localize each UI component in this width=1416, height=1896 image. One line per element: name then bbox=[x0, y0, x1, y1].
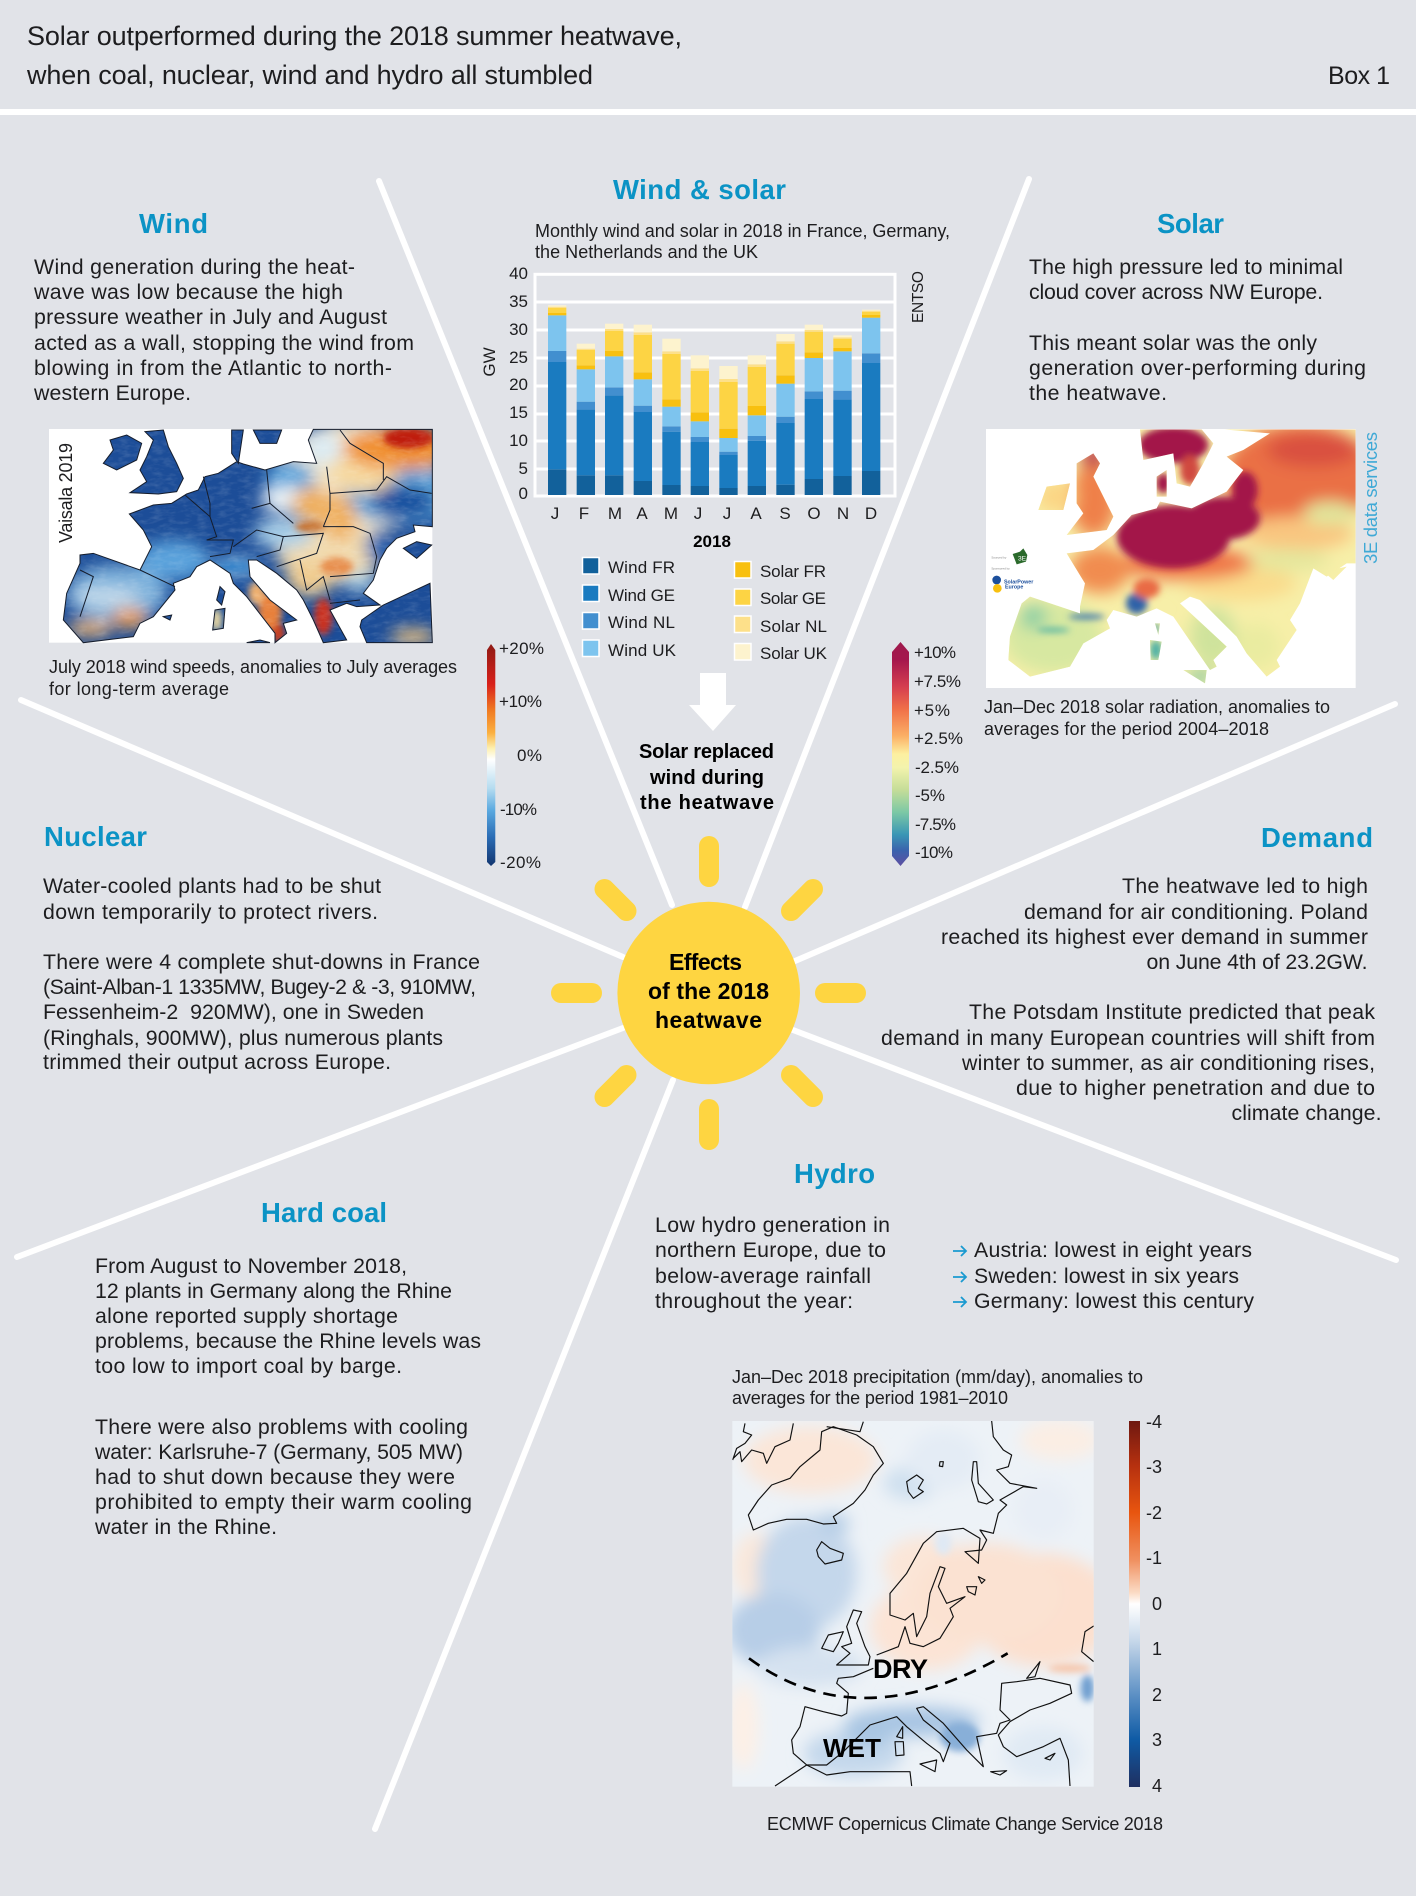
heading: hydro: Hydro bbox=[794, 1158, 875, 1189]
precipitation colour scale: 1 bbox=[1152, 1639, 1162, 1659]
y axis labels: 0 bbox=[519, 484, 528, 503]
sun disc bbox=[617, 902, 800, 1084]
month labels bbox=[551, 504, 877, 523]
logo: SolarPower Europe bbox=[992, 576, 1033, 593]
solar colour scale bbox=[892, 642, 963, 866]
heading: solar: Solar bbox=[1157, 208, 1224, 239]
panel: wind and solar chart bbox=[480, 174, 950, 814]
wind colour scale: +20% bbox=[499, 639, 544, 658]
precipitation colour scale: 2 bbox=[1152, 1685, 1162, 1705]
title: when coal, nuclear, wind and hydro all stumbled bbox=[26, 60, 593, 90]
header rule bbox=[0, 109, 1416, 115]
hydro map caption: Jan–Dec 2018 precipitation (mm/day), anomalies to bbox=[732, 1367, 1143, 1387]
y axis labels: 30 bbox=[509, 320, 528, 339]
wind body text: western Europe. bbox=[33, 381, 191, 405]
source: ENTSO: ENTSO bbox=[910, 271, 927, 323]
title: Solar outperformed during the 2018 summer heatwave, bbox=[27, 21, 682, 51]
hard coal body text: There were also problems with cooling bbox=[95, 1415, 468, 1439]
nuclear body text: (Ringhals, 900MW), plus numerous plants bbox=[43, 1026, 443, 1050]
nuclear body text: (Saint-Alban-1 1335MW, Bugey-2 & -3, 910MW, bbox=[43, 975, 476, 999]
callout: solar replaced wind: wind during bbox=[649, 767, 764, 789]
sun text: heatwave bbox=[655, 1007, 762, 1033]
demand body text: demand in many European countries will shift from bbox=[881, 1026, 1375, 1050]
hydro bullet list: Sweden: lowest in six years bbox=[974, 1264, 1239, 1288]
month labels: J bbox=[694, 504, 702, 523]
hydro map caption: averages for the period 1981–2010 bbox=[732, 1388, 1008, 1408]
hard coal body text: water: Karlsruhe-7 (Germany, 505 MW) bbox=[94, 1440, 463, 1464]
callout: solar replaced wind bbox=[639, 741, 774, 814]
sun text bbox=[648, 949, 769, 1033]
label: DRY: DRY bbox=[873, 1654, 928, 1684]
chart legend: Solar UK bbox=[760, 644, 828, 663]
hard coal body text: alone reported supply shortage bbox=[95, 1304, 398, 1328]
stacked bar chart bbox=[480, 264, 927, 551]
solar body text: cloud cover across NW Europe. bbox=[1029, 280, 1323, 304]
precipitation colour scale: -2 bbox=[1146, 1503, 1162, 1523]
chart legend bbox=[582, 558, 828, 663]
logo: 3E bbox=[991, 548, 1027, 571]
panel: nuclear bbox=[43, 821, 480, 1074]
precipitation colour scale: -1 bbox=[1146, 1548, 1162, 1568]
precipitation colour scale: -4 bbox=[1146, 1412, 1162, 1432]
sun: effects of the 2018 heatwave bbox=[561, 846, 856, 1140]
nuclear body text: Water-cooled plants had to be shut bbox=[43, 874, 381, 898]
wind colour scale: -20% bbox=[500, 853, 541, 872]
month labels: J bbox=[723, 504, 731, 523]
y axis labels: 40 bbox=[509, 264, 528, 283]
chart legend: Wind NL bbox=[608, 613, 675, 632]
source: 3E data services: 3E data services bbox=[1360, 432, 1381, 564]
hard coal body text: problems, because the Rhine levels was bbox=[95, 1329, 481, 1353]
solar colour scale: -7.5% bbox=[915, 815, 956, 834]
precipitation colour scale: -3 bbox=[1146, 1457, 1162, 1477]
wind body text: wave was low because the high bbox=[33, 280, 343, 304]
heading: nuclear: Nuclear bbox=[44, 821, 147, 852]
demand body text: The Potsdam Institute predicted that peak bbox=[969, 1000, 1375, 1024]
nuclear body text bbox=[43, 874, 480, 1074]
solar colour scale: +5% bbox=[914, 701, 950, 720]
logo: 3E: 3E bbox=[1018, 555, 1027, 562]
callout: solar replaced wind: Solar replaced bbox=[639, 741, 774, 763]
solar colour scale: +10% bbox=[914, 643, 956, 662]
solar colour scale: +2.5% bbox=[914, 729, 963, 748]
solar colour scale: -10% bbox=[915, 843, 953, 862]
icon: arrow bullets bbox=[953, 1246, 966, 1307]
map: July 2018 wind speed anomalies bbox=[49, 420, 457, 645]
dry/wet boundary line bbox=[749, 1653, 1008, 1698]
month labels: S bbox=[779, 504, 791, 523]
month labels: M bbox=[664, 504, 678, 523]
hard coal body text: prohibited to empty their warm cooling bbox=[95, 1490, 472, 1514]
y axis labels: 25 bbox=[509, 348, 528, 367]
hard coal body text: 12 plants in Germany along the Rhine bbox=[95, 1279, 452, 1303]
map: precipitation anomalies bbox=[727, 1420, 1117, 1787]
precipitation colour scale: 0 bbox=[1152, 1594, 1162, 1614]
arrow: down to sun bbox=[689, 673, 736, 731]
chart subtitle: Monthly wind and solar in 2018 in France, Germany, bbox=[535, 221, 950, 241]
month labels: A bbox=[636, 504, 648, 523]
y axis labels: 20 bbox=[509, 375, 528, 394]
demand body text: on June 4th of 23.2GW. bbox=[1146, 950, 1368, 974]
hard coal body text: From August to November 2018, bbox=[95, 1254, 407, 1278]
chart legend: Wind FR bbox=[608, 558, 675, 577]
solar colour scale: +7.5% bbox=[914, 672, 961, 691]
y axis labels bbox=[509, 264, 528, 503]
label: WET: WET bbox=[823, 1733, 881, 1763]
solar map caption: averages for the period 2004–2018 bbox=[984, 719, 1269, 739]
demand body text: climate change. bbox=[1232, 1101, 1382, 1125]
month labels: A bbox=[750, 504, 762, 523]
x axis title: 2018 bbox=[693, 532, 731, 551]
y axis labels: 10 bbox=[509, 431, 528, 450]
logo: SolarPower Europe: Europe bbox=[1005, 584, 1023, 590]
hydro bullet list: Austria: lowest in eight years bbox=[974, 1238, 1252, 1262]
map: solar radiation anomalies bbox=[986, 423, 1377, 688]
sun rays bbox=[561, 846, 856, 1140]
wind body text: blowing in from the Atlantic to north- bbox=[34, 356, 392, 380]
wind colour scale: 0% bbox=[517, 746, 542, 765]
y axis labels: 5 bbox=[519, 459, 528, 478]
hydro body text: northern Europe, due to bbox=[655, 1238, 886, 1262]
hard coal body text: had to shut down because they were bbox=[95, 1465, 455, 1489]
hard coal body text: too low to import coal by barge. bbox=[95, 1354, 402, 1378]
solar map caption: Jan–Dec 2018 solar radiation, anomalies to bbox=[984, 697, 1330, 717]
demand body text: reached its highest ever demand in summer bbox=[941, 925, 1368, 949]
hard coal body text bbox=[94, 1254, 481, 1539]
hydro body text: Low hydro generation in bbox=[655, 1213, 890, 1237]
bars bbox=[548, 305, 880, 495]
wind body text: pressure weather in July and August bbox=[34, 305, 387, 329]
chart legend: Wind GE bbox=[608, 586, 675, 605]
source: ECMWF: ECMWF Copernicus Climate Change Service 2018 bbox=[767, 1814, 1163, 1834]
month labels: D bbox=[865, 504, 877, 523]
demand body text: due to higher penetration and due to bbox=[1016, 1076, 1375, 1100]
solar body text: The high pressure led to minimal bbox=[1029, 255, 1343, 279]
panel: demand bbox=[881, 822, 1382, 1125]
solar map caption bbox=[984, 697, 1330, 739]
wind colour scale: -10% bbox=[500, 800, 537, 819]
solar body text bbox=[1029, 255, 1366, 405]
chart legend: Solar GE bbox=[760, 589, 826, 608]
logo: 3E: Sponsored by bbox=[991, 567, 1010, 571]
wind map caption: for long-term average bbox=[49, 679, 229, 699]
precipitation colour scale: 3 bbox=[1152, 1730, 1162, 1750]
wind body text: Wind generation during the heat- bbox=[34, 255, 355, 279]
hydro body text: throughout the year: bbox=[655, 1289, 853, 1313]
box label: Box 1 bbox=[1328, 62, 1390, 90]
hydro bullet list bbox=[953, 1238, 1254, 1313]
solar body text: generation over-performing during bbox=[1029, 356, 1366, 380]
demand body text: demand for air conditioning. Poland bbox=[1024, 900, 1368, 924]
chart legend: Wind UK bbox=[608, 641, 677, 660]
nuclear body text: There were 4 complete shut-downs in France bbox=[43, 950, 480, 974]
solar colour scale: -5% bbox=[915, 786, 945, 805]
chart legend: Solar NL bbox=[760, 617, 827, 636]
hard coal body text: water in the Rhine. bbox=[94, 1515, 277, 1539]
precipitation colour scale bbox=[1129, 1412, 1162, 1796]
panel: hard coal bbox=[94, 1197, 481, 1539]
panel: hydro bbox=[655, 1158, 1254, 1834]
y axis labels: 15 bbox=[509, 403, 528, 422]
panel: solar bbox=[892, 208, 1381, 866]
heading: hard coal: Hard coal bbox=[261, 1197, 387, 1228]
wind body text: acted as a wall, stopping the wind from bbox=[34, 331, 414, 355]
wind colour scale bbox=[487, 639, 544, 872]
chart subtitle: the Netherlands and the UK bbox=[535, 242, 758, 262]
chart legend: Solar FR bbox=[760, 562, 826, 581]
month labels: O bbox=[807, 504, 821, 523]
nuclear body text: down temporarily to protect rivers. bbox=[43, 900, 378, 924]
header bbox=[0, 21, 1416, 115]
nuclear body text: Fessenheim-2 920MW), one in Sweden bbox=[43, 1000, 424, 1024]
month labels: M bbox=[608, 504, 622, 523]
hydro body text: below-average rainfall bbox=[655, 1264, 871, 1288]
precipitation colour scale: 4 bbox=[1152, 1776, 1162, 1796]
hydro map caption bbox=[732, 1367, 1143, 1408]
month labels: J bbox=[551, 504, 559, 523]
wind map caption bbox=[49, 657, 457, 699]
hydro bullet list: Germany: lowest this century bbox=[974, 1289, 1254, 1313]
logo: SolarPower Europe: SolarPower bbox=[1004, 579, 1033, 585]
solar body text: the heatwave. bbox=[1029, 381, 1167, 405]
solar body text: This meant solar was the only bbox=[1029, 331, 1317, 355]
heading: demand: Demand bbox=[1261, 822, 1373, 853]
heading: wind and solar: Wind & solar bbox=[613, 174, 786, 205]
sun text: of the 2018 bbox=[648, 978, 769, 1004]
y axis title: GW bbox=[480, 347, 499, 377]
y axis labels: 35 bbox=[509, 292, 528, 311]
solar colour scale: -2.5% bbox=[915, 758, 959, 777]
chart subtitle bbox=[535, 221, 950, 262]
sun text: Effects bbox=[669, 949, 742, 975]
demand body text: winter to summer, as air conditioning rises, bbox=[961, 1051, 1375, 1075]
title bbox=[26, 21, 682, 90]
month labels: F bbox=[579, 504, 589, 523]
nuclear body text: trimmed their output across Europe. bbox=[43, 1050, 391, 1074]
logo: 3E: Sourced by bbox=[991, 556, 1007, 560]
month labels: N bbox=[837, 504, 849, 523]
demand body text bbox=[881, 874, 1382, 1125]
wind colour scale: +10% bbox=[499, 692, 542, 711]
wind body text bbox=[33, 255, 414, 405]
wind map caption: July 2018 wind speeds, anomalies to July averages bbox=[49, 657, 457, 677]
hydro body text bbox=[655, 1213, 890, 1313]
source: Vaisala: Vaisala 2019 bbox=[56, 443, 76, 543]
heading: wind: Wind bbox=[139, 208, 208, 239]
callout: solar replaced wind: the heatwave bbox=[640, 792, 774, 814]
demand body text: The heatwave led to high bbox=[1122, 874, 1368, 898]
panel: wind bbox=[33, 208, 544, 872]
